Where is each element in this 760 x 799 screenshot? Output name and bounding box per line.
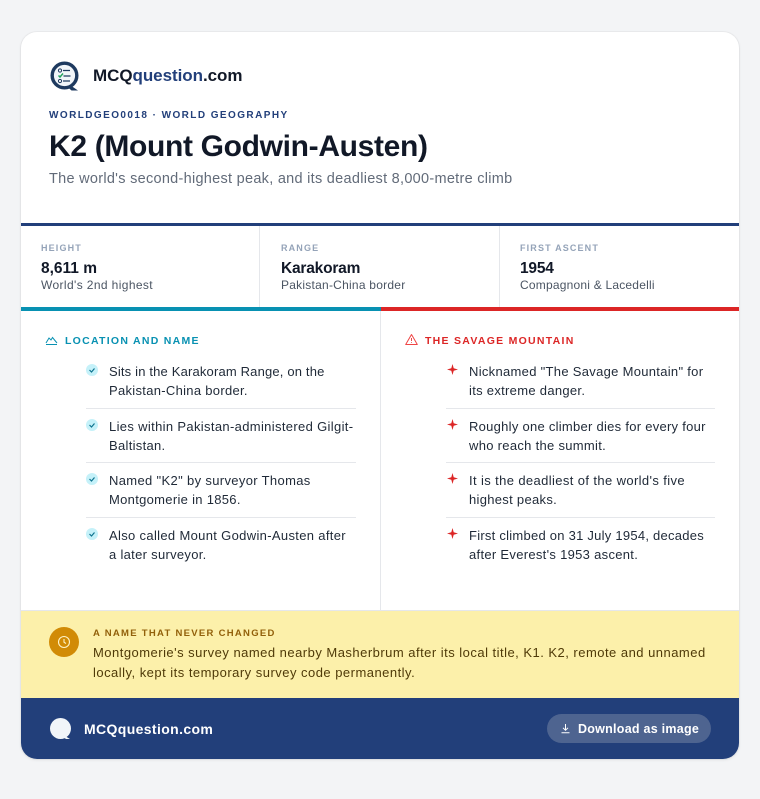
item 2 (86, 419, 353, 453)
button label: Download as image (578, 722, 699, 736)
item 1: Pakistan-China border. (109, 383, 248, 398)
item 1: Nicknamed "The Savage Mountain" for (469, 364, 703, 379)
item 4: after Everest's 1953 ascent. (469, 547, 638, 562)
item 1 (86, 364, 325, 398)
item 2 (447, 419, 706, 453)
footer logo icon (50, 718, 71, 739)
icon: clock (49, 627, 79, 657)
heading: THE SAVAGE MOUNTAIN (425, 335, 575, 347)
icon: mountain (46, 336, 58, 345)
stat: range: Karakoram (281, 260, 360, 277)
item 3: highest peaks. (469, 492, 557, 507)
stat: range: RANGE (281, 243, 319, 253)
stat: range (281, 243, 406, 292)
stat: first ascent: Compagnoni & Lacedelli (520, 278, 655, 292)
stat: height: 8,611 m (41, 260, 97, 277)
stat: first ascent: FIRST ASCENT (520, 243, 599, 253)
item 3: It is the deadliest of the world's five (469, 473, 685, 488)
item 1: its extreme danger. (469, 383, 585, 398)
callout (21, 610, 739, 698)
item 1: Sits in the Karakoram Range, on the (109, 364, 325, 379)
callout text (93, 645, 706, 680)
item 4 (86, 528, 346, 562)
item 3: Montgomerie in 1856. (109, 492, 241, 507)
item 2: who reach the summit. (469, 438, 606, 453)
logo icon (50, 62, 78, 90)
download button (547, 714, 711, 743)
stat: height (41, 243, 153, 292)
callout text: locally, kept its temporary survey code permanently. (93, 664, 415, 680)
stat: range: Pakistan-China border (281, 278, 405, 292)
item 2: Lies within Pakistan-administered Gilgit- (109, 419, 353, 434)
item 2: Baltistan. (109, 438, 165, 453)
logo wordmark: MCQquestion.com (93, 66, 242, 85)
panel: the savage mountain (381, 307, 739, 562)
item 1 (447, 364, 703, 398)
top rule (21, 223, 739, 226)
icon: warning (405, 334, 418, 345)
callout heading: A NAME THAT NEVER CHANGED (93, 628, 276, 639)
heading: LOCATION AND NAME (65, 335, 200, 347)
panel: location and name (21, 307, 381, 562)
item 4: Also called Mount Godwin-Austen after (109, 528, 346, 543)
stat: first ascent (520, 243, 655, 292)
item 3 (447, 473, 685, 507)
item 4 (447, 528, 704, 562)
title: K2 (Mount Godwin-Austen) (49, 130, 428, 163)
footer (21, 698, 739, 759)
stat: height: World's 2nd highest (41, 278, 153, 292)
item 4: a later surveyor. (109, 547, 207, 562)
item 3 (86, 473, 311, 507)
icon: download (562, 724, 570, 734)
footer wordmark: MCQquestion.com (84, 721, 213, 737)
item 3: Named "K2" by surveyor Thomas (109, 473, 311, 488)
panel divider (380, 311, 381, 610)
subtitle: The world's second-highest peak, and its deadliest 8,000-metre climb (49, 170, 512, 186)
callout text: Montgomerie's survey named nearby Masherbrum after its local title, K1. K2, remote and unnamed (93, 645, 706, 660)
stat: height: HEIGHT (41, 243, 82, 253)
item 2: Roughly one climber dies for every four (469, 419, 706, 434)
stat: first ascent: 1954 (520, 260, 554, 277)
stats strip (21, 223, 739, 307)
item 4: First climbed on 31 July 1954, decades (469, 528, 704, 543)
eyebrow: WORLDGEO0018 · WORLD GEOGRAPHY (49, 110, 289, 120)
